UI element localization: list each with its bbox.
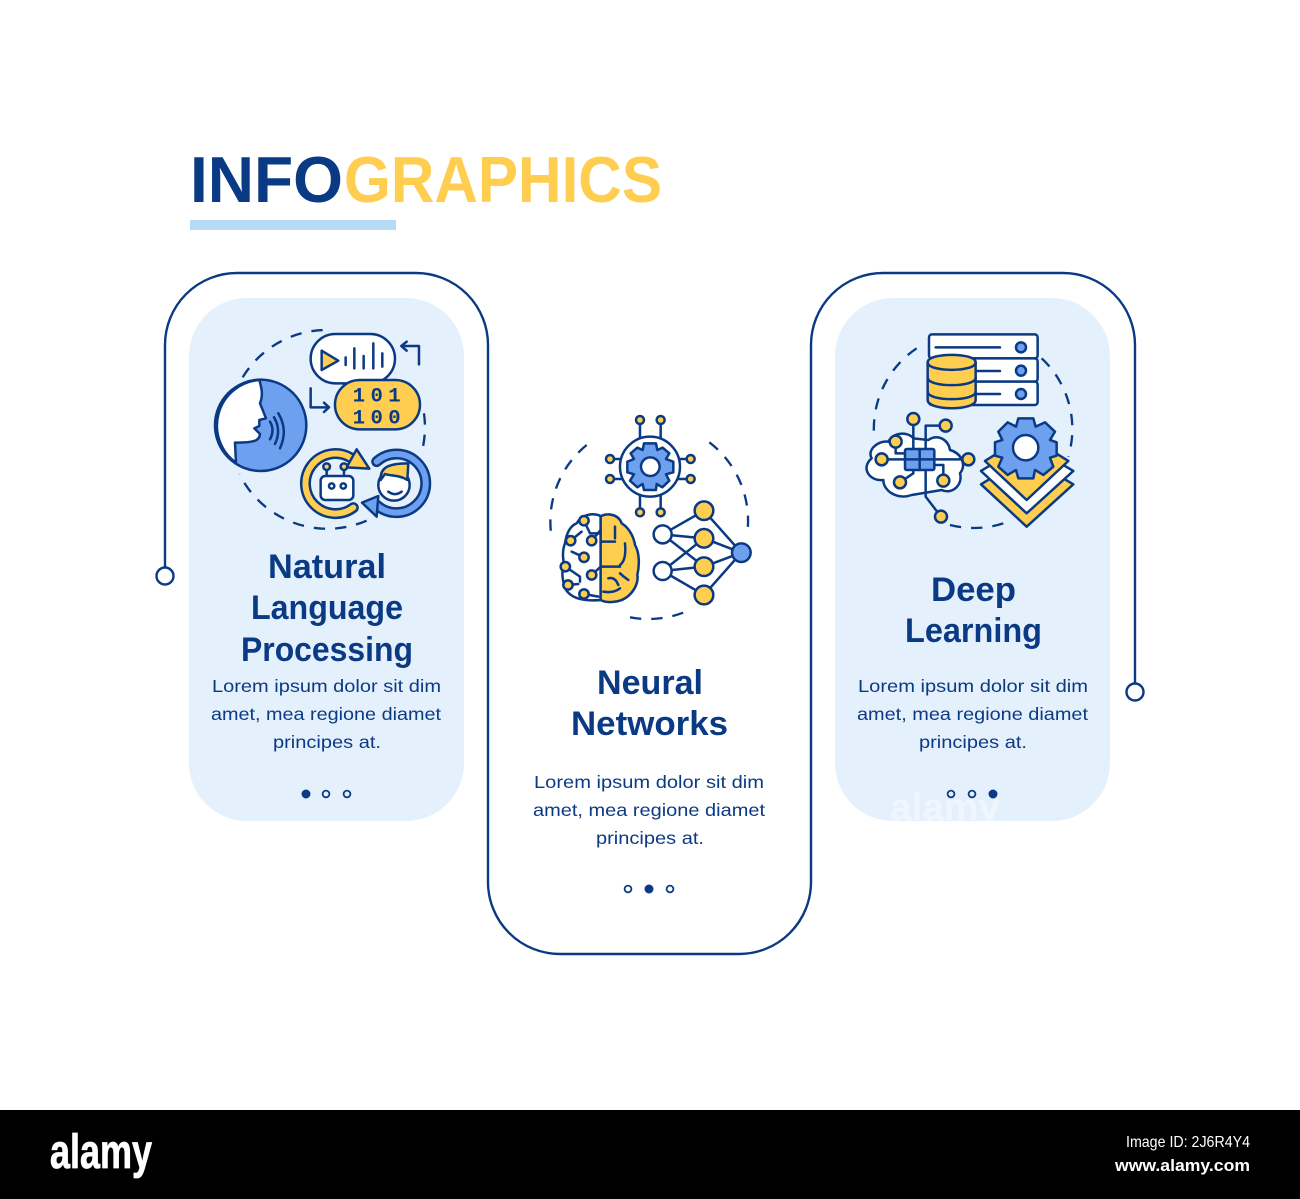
body text: left panel: amet, mea regione diamet (211, 704, 441, 724)
connecting outline (165, 273, 1135, 954)
icon: natural language processing: 100 (353, 407, 401, 430)
icon: deep learning (867, 334, 1073, 528)
heading: natural language processing: Processing (241, 631, 413, 669)
heading: neural networks: Networks (571, 705, 728, 743)
outline end node (1126, 684, 1144, 700)
title (190, 143, 662, 216)
body text: center panel: amet, mea regione diamet (533, 800, 765, 820)
title underline (190, 220, 396, 230)
title: INFO (190, 143, 343, 216)
footer bar (0, 1110, 1300, 1199)
icon: natural language processing (215, 330, 426, 529)
title: GRAPHICS (344, 143, 662, 216)
heading: deep learning (905, 571, 1042, 650)
pagination dots: center panel (625, 885, 673, 893)
heading: deep learning: Learning (905, 612, 1042, 650)
body text: left panel: Lorem ipsum dolor sit dim (212, 676, 441, 696)
footer image id: Image ID: 2J6R4Y4 (1126, 1134, 1250, 1151)
heading: deep learning: Deep (931, 571, 1016, 609)
body text: left panel: principes at. (273, 732, 381, 752)
panel: right background (835, 298, 1110, 821)
heading: neural networks (571, 664, 728, 743)
body text: left panel (211, 676, 441, 752)
icon: natural language processing: 101 (353, 386, 401, 409)
body text: right panel: amet, mea regione diamet (857, 704, 1088, 724)
footer logo: alamy (50, 1126, 152, 1179)
heading: natural language processing: Language (251, 589, 403, 627)
icon: neural networks (550, 416, 751, 619)
panel: left background (189, 298, 464, 821)
heading: neural networks: Neural (597, 664, 703, 702)
watermark: alamy (890, 787, 1000, 829)
heading: natural language processing (241, 548, 413, 669)
body text: center panel: principes at. (596, 828, 704, 848)
footer url: www.alamy.com (1114, 1156, 1250, 1175)
heading: natural language processing: Natural (268, 548, 386, 586)
body text: center panel (533, 772, 765, 848)
body text: right panel: principes at. (919, 732, 1027, 752)
body text: right panel: Lorem ipsum dolor sit dim (858, 676, 1088, 696)
body text: right panel (857, 676, 1088, 752)
pagination dots: left panel (302, 790, 350, 798)
outline start node (156, 568, 174, 584)
body text: center panel: Lorem ipsum dolor sit dim (534, 772, 764, 792)
pagination dots: right panel (948, 790, 997, 798)
